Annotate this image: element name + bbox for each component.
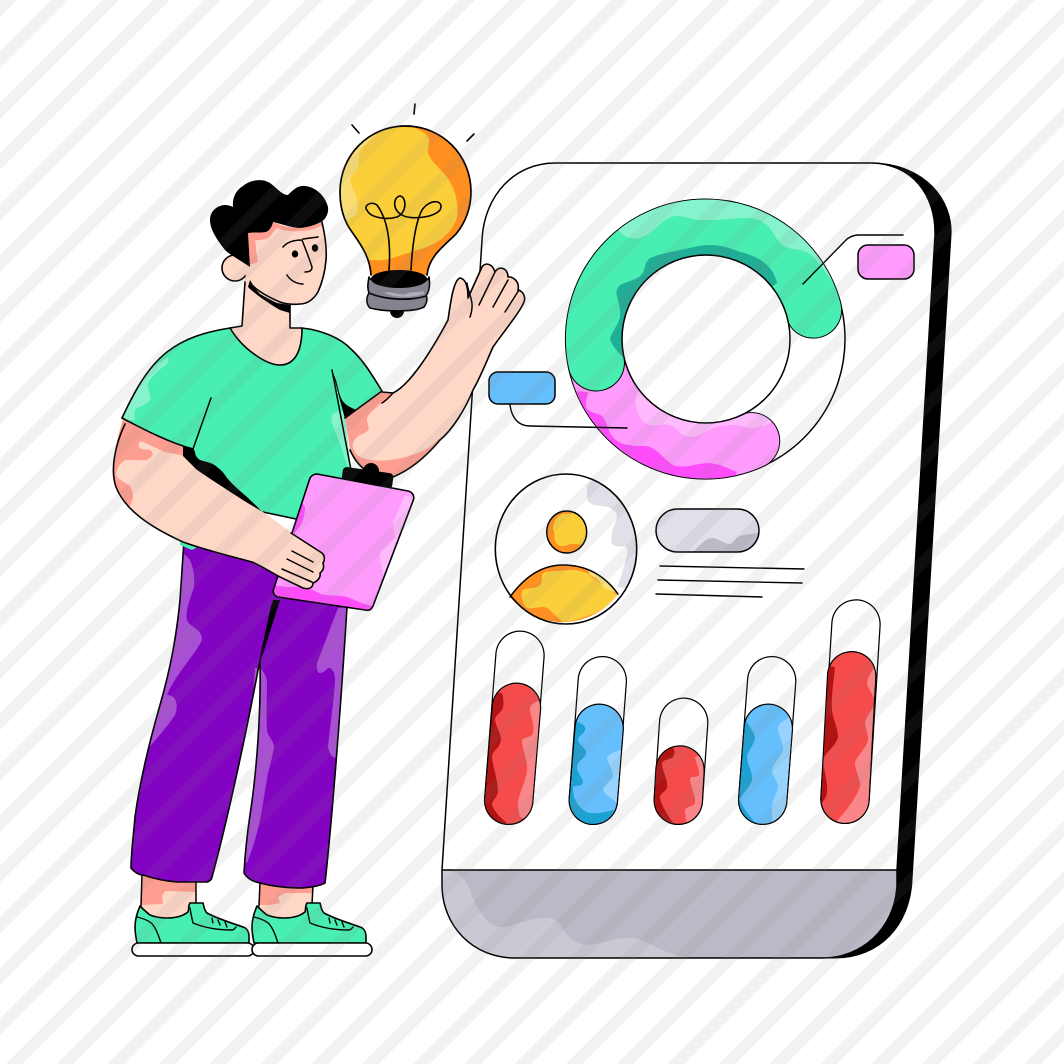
left ankle	[141, 872, 196, 925]
t-shirt	[115, 328, 382, 550]
avatar circle shading	[586, 480, 636, 588]
profile text lines	[656, 566, 804, 597]
device: phone back shadow	[800, 163, 951, 958]
bar 3 red	[654, 698, 708, 825]
avatar head icon	[547, 511, 590, 553]
avatar	[494, 473, 638, 625]
avatar shoulders icon	[510, 565, 618, 622]
right ankle	[259, 880, 313, 925]
bar 4 blue	[738, 656, 796, 825]
face	[244, 222, 326, 313]
bulb screw base	[367, 270, 430, 311]
hair	[210, 180, 328, 267]
brows, nose and smile	[283, 237, 318, 284]
bar chart	[470, 624, 900, 830]
callout: pink label with leader	[803, 235, 914, 284]
character	[105, 180, 525, 956]
bar 2 blue	[568, 656, 628, 825]
donut outer ring	[566, 200, 845, 478]
clipboard clip	[341, 463, 394, 490]
pink label box	[858, 245, 914, 279]
phone bottom band	[442, 870, 896, 958]
blue label box	[489, 372, 555, 404]
eyes	[292, 244, 318, 258]
clipboard	[265, 463, 420, 615]
bulb nub	[390, 304, 404, 318]
phone body	[442, 163, 935, 958]
left shoe	[135, 903, 249, 943]
donut chart	[564, 198, 846, 480]
grey name pill	[656, 509, 760, 553]
blue leader line	[510, 405, 627, 428]
lightbulb	[330, 104, 474, 318]
green donut segment	[594, 180, 880, 363]
phone outline	[442, 163, 935, 958]
ear	[222, 255, 248, 281]
bulb filament	[366, 196, 441, 270]
bulb rays	[352, 104, 474, 141]
device: phone panel	[430, 163, 935, 965]
raised arm and hand	[340, 264, 525, 490]
avatar ring	[495, 474, 637, 624]
bulb glass	[330, 120, 471, 275]
holding arm and hand	[105, 415, 324, 589]
pink donut segment	[568, 363, 780, 480]
bar 1 red	[484, 630, 545, 825]
right shoe sole	[252, 943, 372, 956]
donut hole	[622, 255, 790, 423]
bar 5 red	[820, 599, 881, 824]
shirt fold shadows	[183, 370, 357, 513]
neck	[230, 275, 302, 365]
left shoe sole	[132, 943, 254, 956]
callout: blue label with leader	[489, 372, 627, 428]
pants	[131, 540, 352, 888]
right shoe	[252, 903, 366, 943]
clipboard board	[265, 474, 420, 615]
pink leader line	[803, 235, 903, 284]
